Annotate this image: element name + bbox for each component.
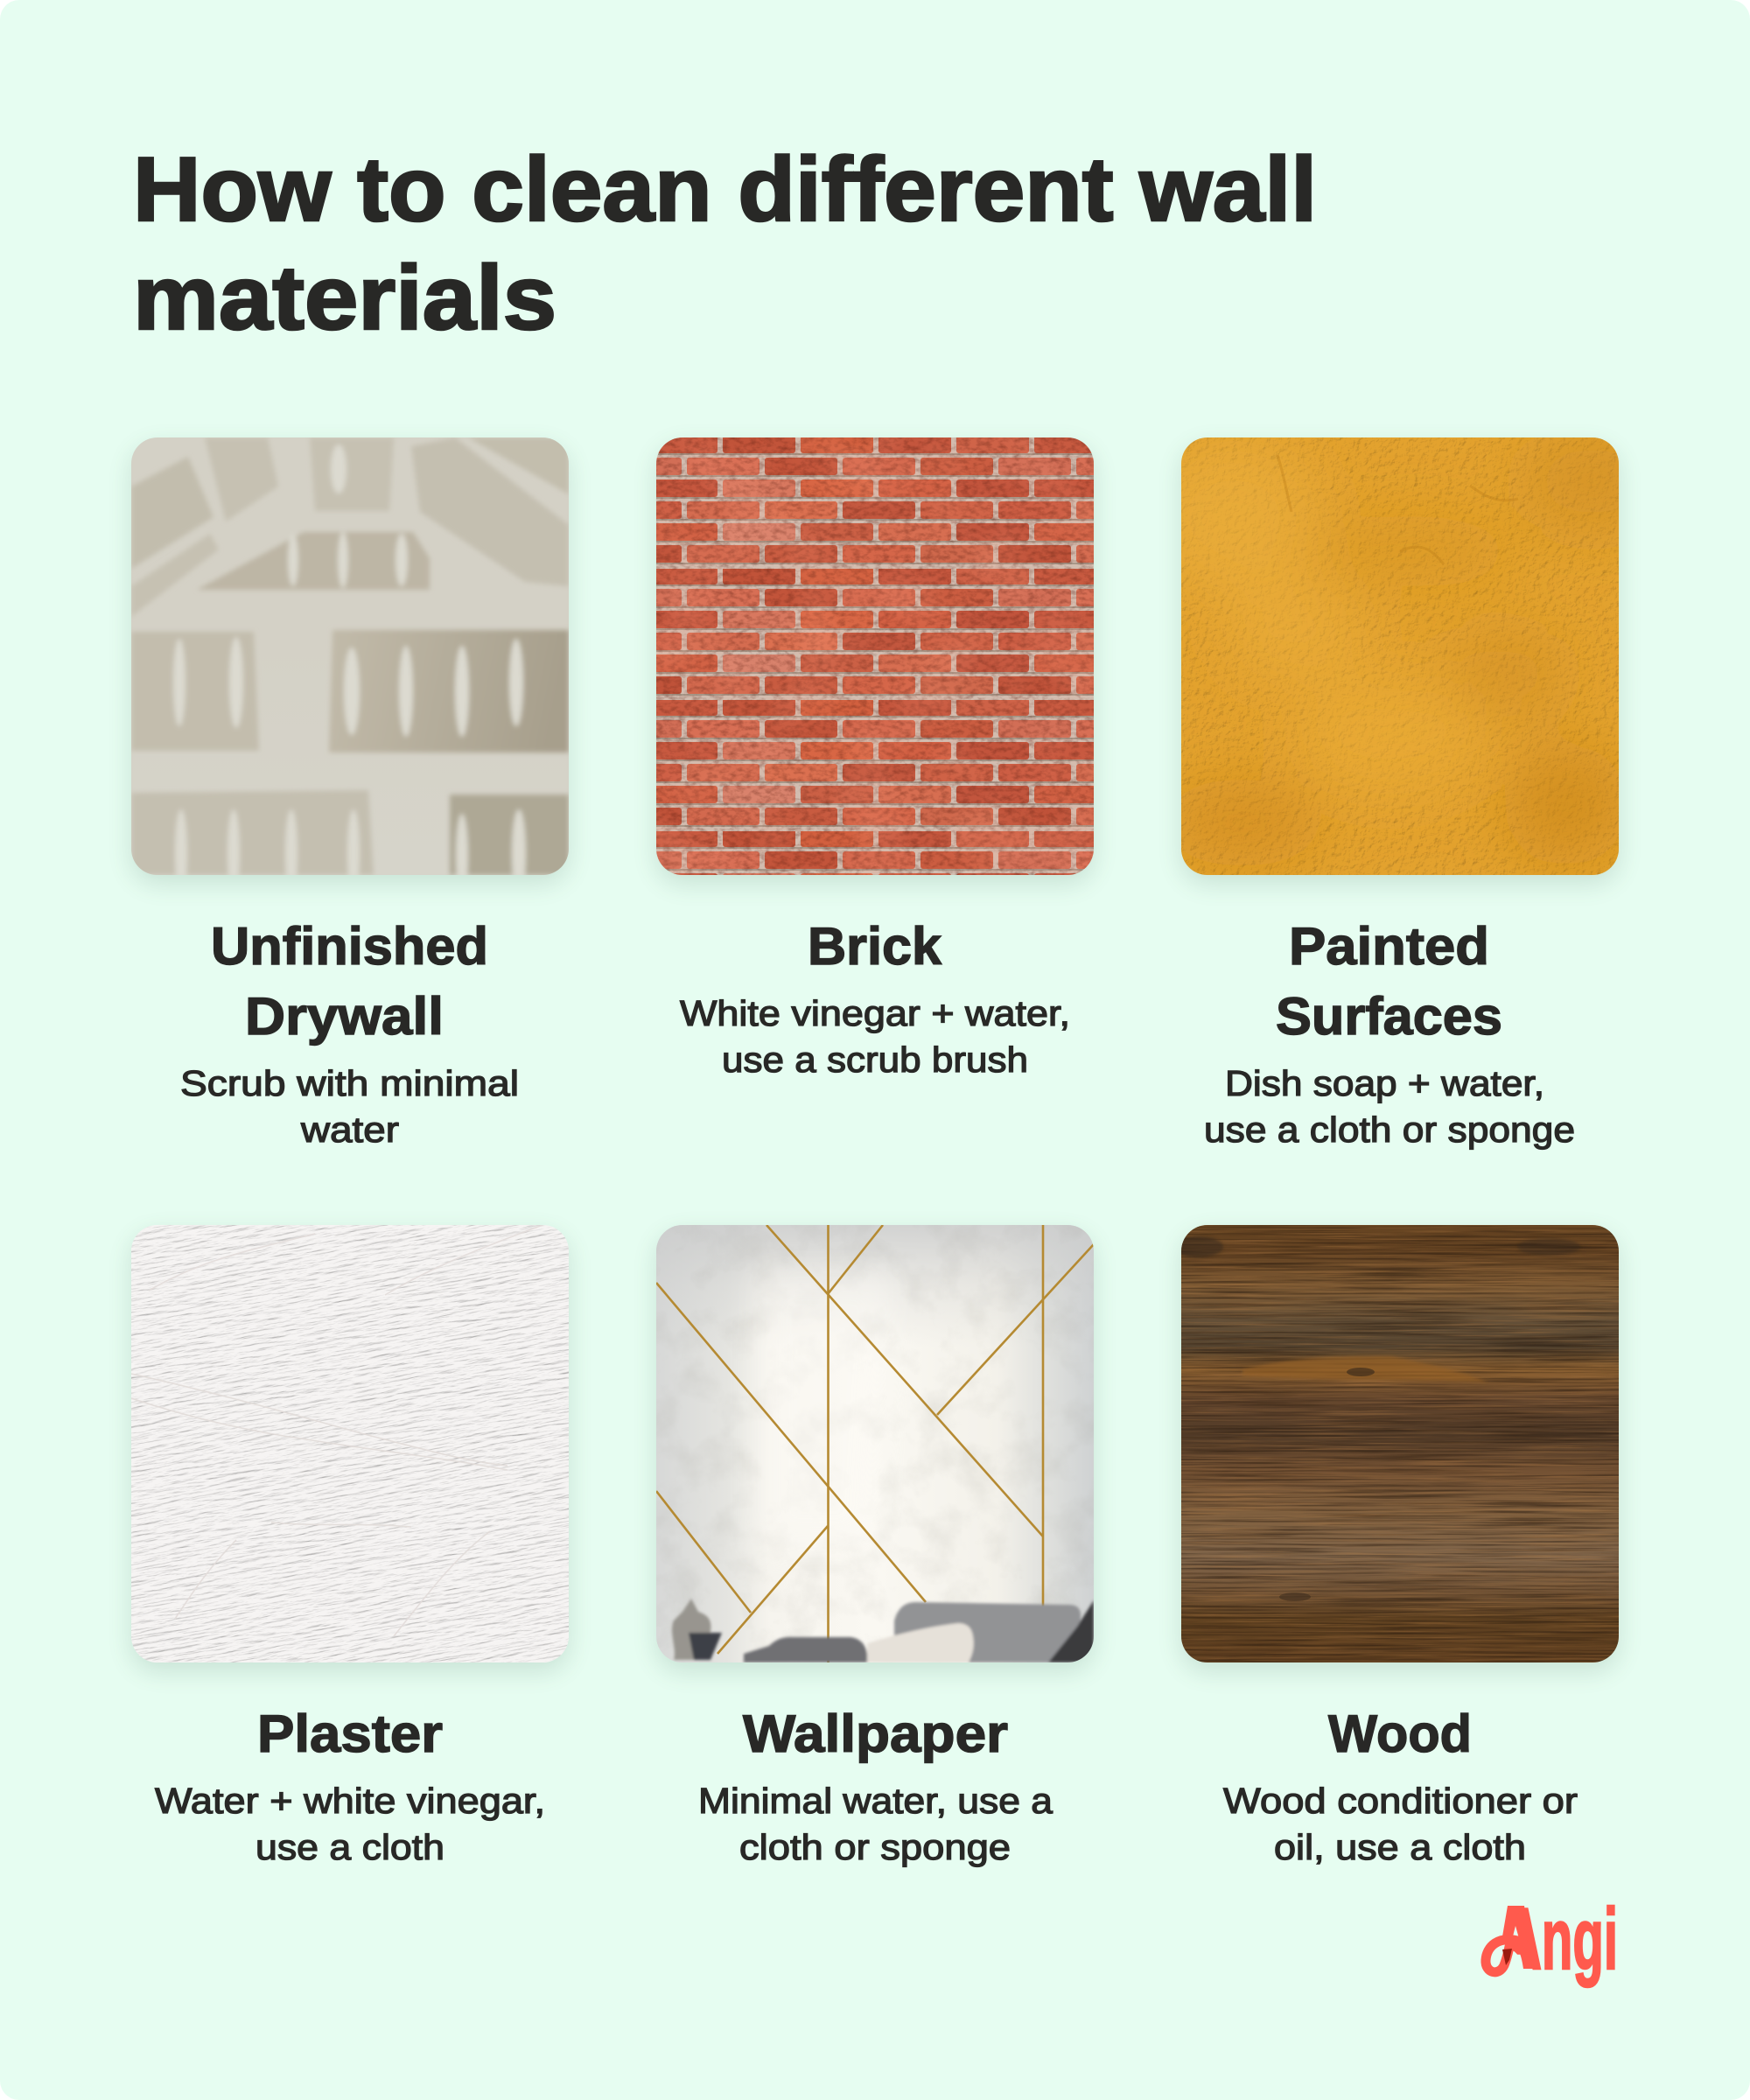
- panel: wood: [1174, 1225, 1619, 1867]
- panel: painted surfaces: [1174, 438, 1626, 1150]
- logo: Angi: Angi: [1505, 1890, 1618, 1987]
- description: Wood conditioner or: [1223, 1781, 1578, 1821]
- logo: Angi: [1486, 1890, 1618, 1987]
- image: brick: [656, 438, 1094, 875]
- heading: Wood: [1328, 1704, 1472, 1763]
- title: How to clean different wall: [133, 139, 1317, 241]
- description: White vinegar + water,: [680, 993, 1070, 1033]
- image: wallpaper: [656, 1225, 1094, 1662]
- description: oil, use a cloth: [1274, 1827, 1526, 1867]
- panel: plaster: [124, 1225, 576, 1860]
- description: Dish soap + water,: [1225, 1063, 1544, 1103]
- description: use a cloth: [256, 1827, 444, 1867]
- panel: wallpaper: [656, 1225, 1094, 1867]
- sofa: [672, 1599, 1094, 1662]
- heading: Painted: [1289, 917, 1489, 976]
- title: materials: [133, 248, 556, 349]
- panel: brick: [656, 438, 1094, 1080]
- image: plaster: [131, 1225, 569, 1662]
- heading: Drywall: [245, 987, 444, 1046]
- image: painted yellow wall: [1181, 438, 1619, 875]
- description: water: [300, 1110, 399, 1150]
- heading: Surfaces: [1276, 987, 1502, 1046]
- description: Water + white vinegar,: [155, 1781, 545, 1821]
- heading: Wallpaper: [743, 1704, 1008, 1763]
- description: cloth or sponge: [739, 1827, 1011, 1867]
- title: [133, 139, 1317, 349]
- heading: Brick: [808, 917, 942, 976]
- panel: unfinished drywall: [131, 438, 569, 1150]
- description: use a scrub brush: [722, 1040, 1028, 1080]
- image: wood: [1174, 1225, 1619, 1662]
- heading: Unfinished: [211, 917, 488, 976]
- heading: Plaster: [257, 1704, 443, 1763]
- image: drywall: [131, 438, 569, 898]
- description: use a cloth or sponge: [1204, 1110, 1575, 1150]
- description: Minimal water, use a: [698, 1781, 1053, 1821]
- description: Scrub with minimal: [180, 1063, 519, 1103]
